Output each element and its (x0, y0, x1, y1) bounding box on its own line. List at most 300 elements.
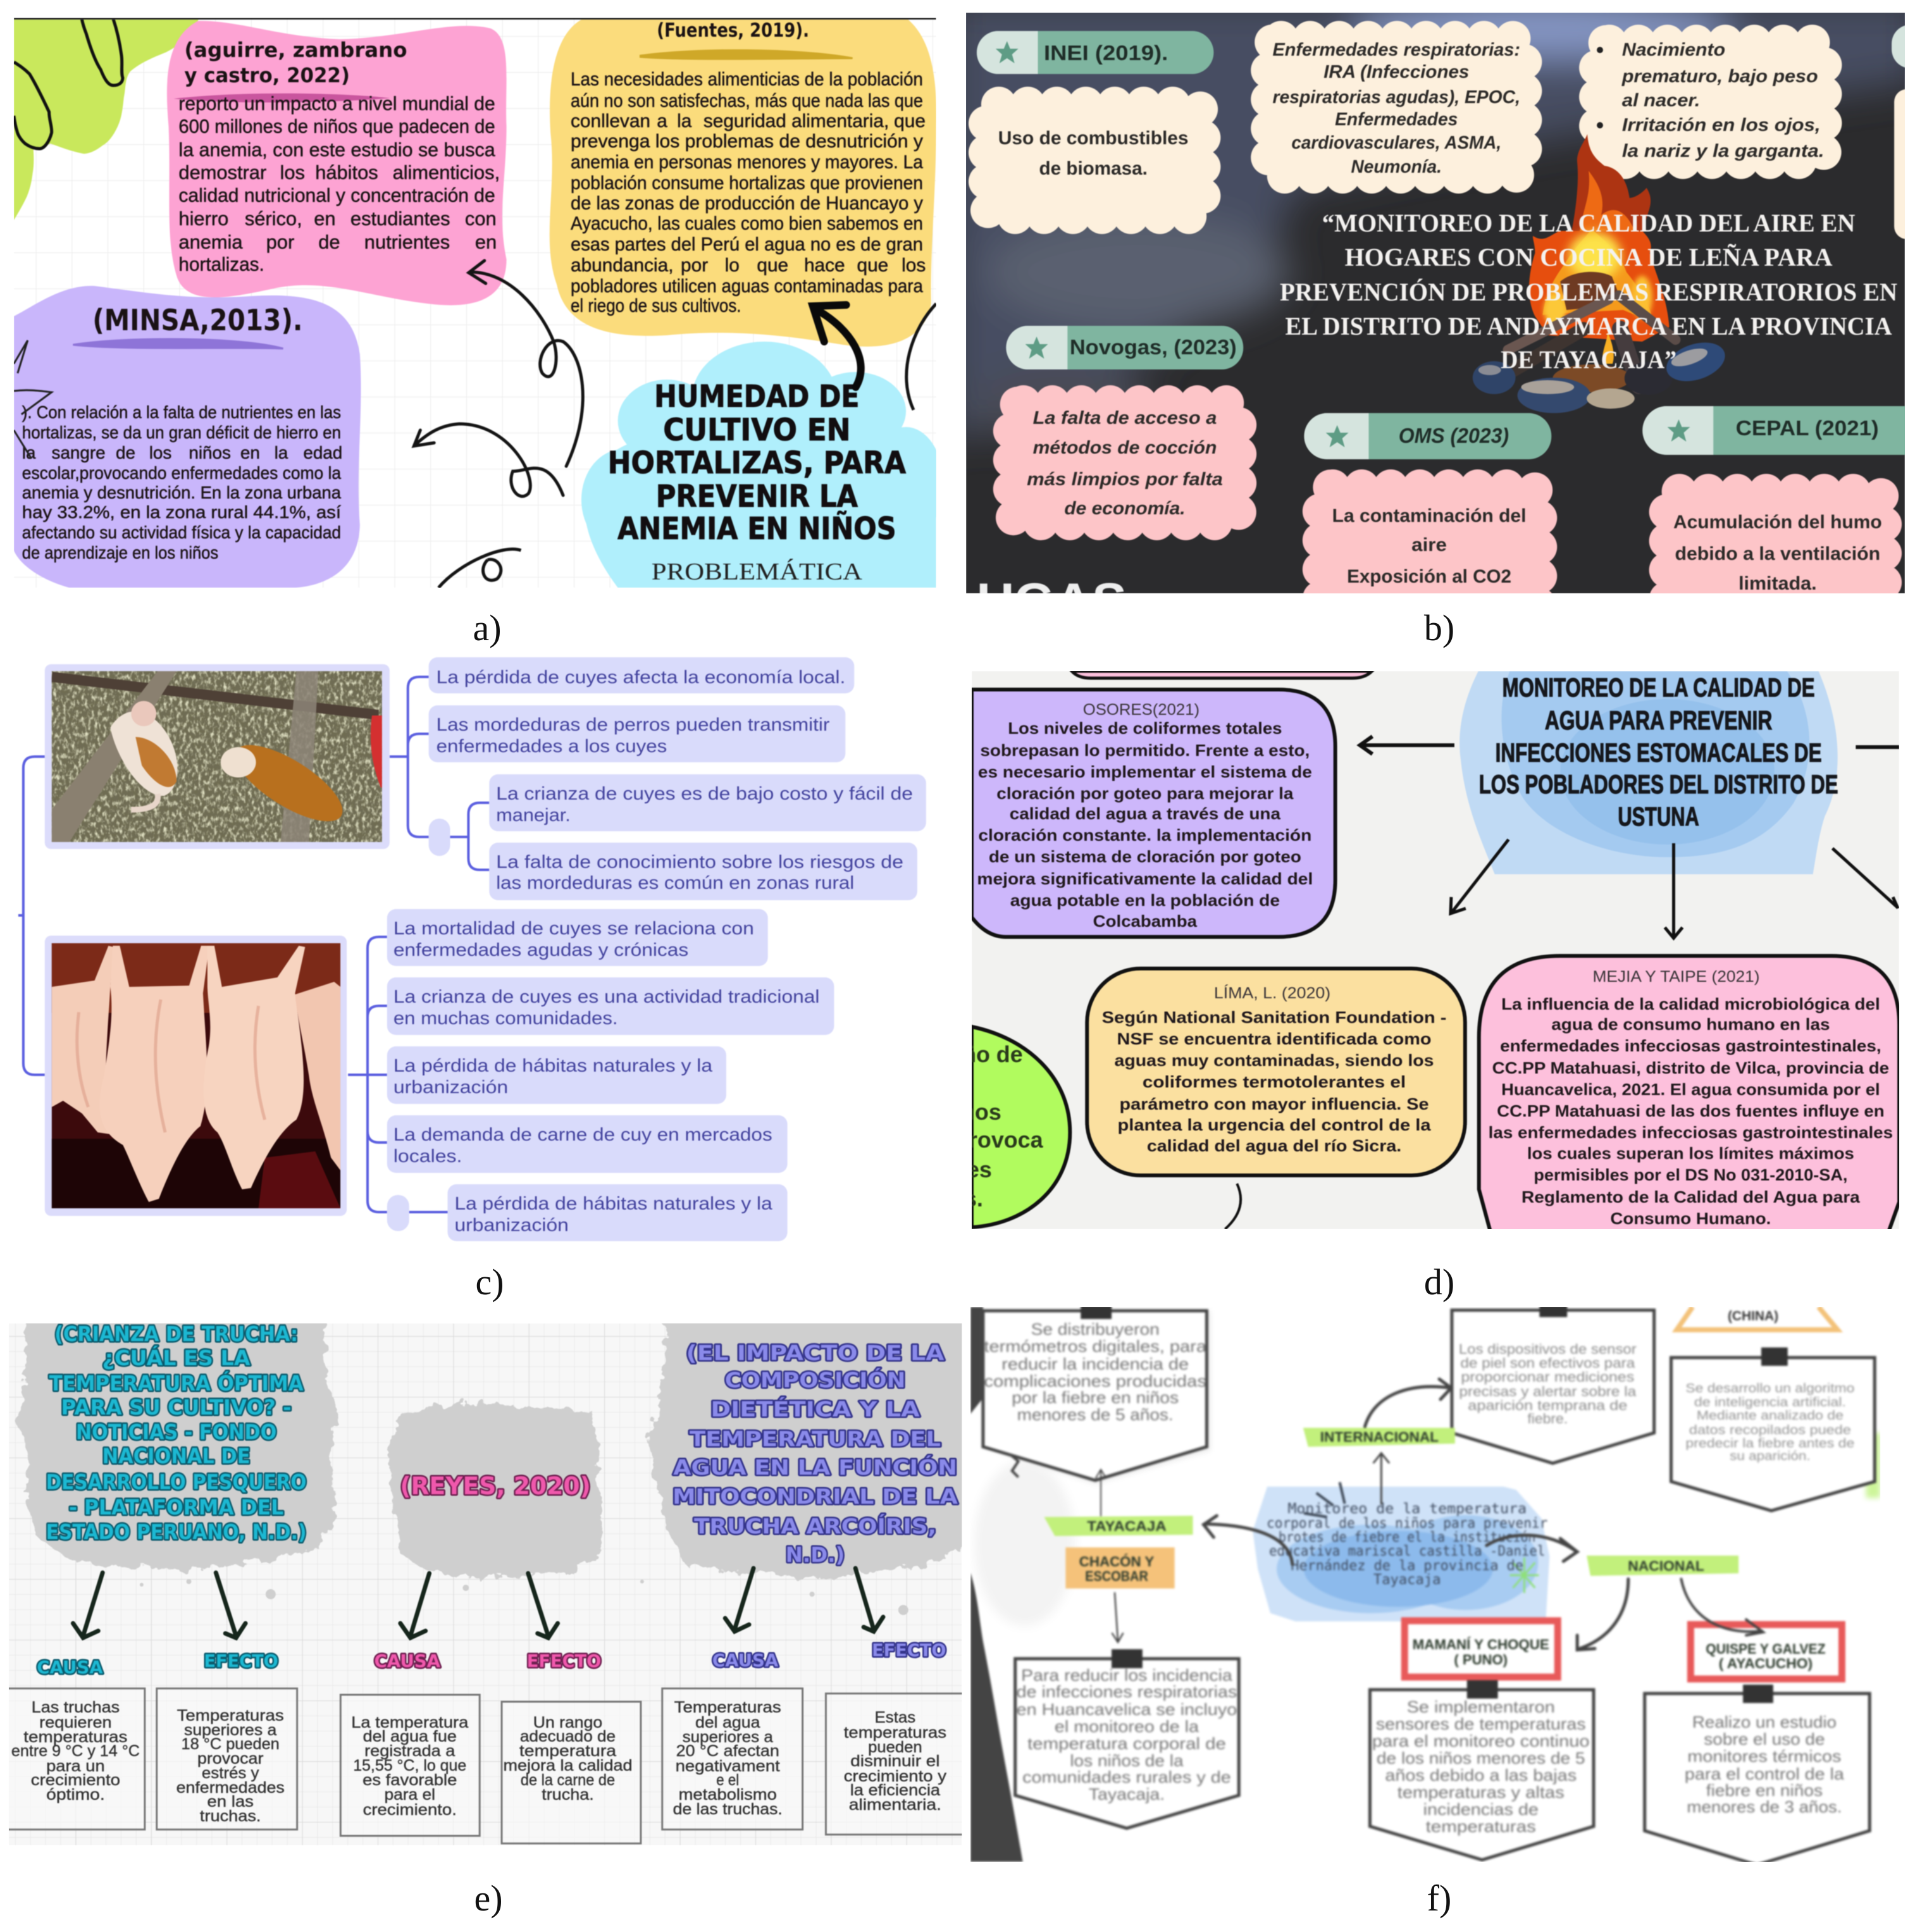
box 5: del agua (695, 1714, 760, 1731)
label: causa 2: CAUSA (375, 1650, 440, 1671)
card: falta de acceso: métodos de cocción (1033, 438, 1217, 458)
label: causa 3: CAUSA (712, 1650, 779, 1671)
caption a: a) (473, 607, 502, 648)
body text: abundancia, (571, 255, 674, 276)
small node oval (429, 819, 450, 856)
pill: Novogas: Novogas, (2023) (1070, 335, 1237, 359)
heading 3: COMPOSICIÓN (725, 1367, 905, 1392)
shield: sensor de piel: de piel son efectivos para (1460, 1355, 1635, 1371)
pill: INEI: INEI (2019). (1044, 41, 1168, 65)
shield: monitores Ayacucho (1645, 1685, 1869, 1865)
shield: sensores Puno (1370, 1680, 1594, 1860)
center text: Monitoreo de la temperatura (1287, 1501, 1527, 1517)
card: acumulación (1667, 492, 1884, 618)
shield: termómetros: menores de 5 años. (1017, 1406, 1174, 1424)
arrows (1360, 736, 1899, 938)
body text: de aprendizaje en los niños (22, 543, 218, 562)
body text: de (318, 231, 340, 253)
shield: algoritmo: Mediante analizado de (1697, 1409, 1844, 1423)
shield: sensores Puno: incidencias de (1423, 1801, 1539, 1819)
label: Tayacaja: TAYACAJA (1087, 1518, 1167, 1534)
heading 3: (EL IMPACTO DE LA (686, 1341, 945, 1365)
title text: ANEMIA EN NIÑOS (617, 511, 896, 547)
center text: brotes de fiebre el la institución (1279, 1530, 1535, 1545)
shield: algoritmo (1671, 1347, 1875, 1511)
node 2: Las mordeduras de perros pueden transmitir (437, 715, 830, 735)
body text: anemia en personas menores y mayores. La (571, 152, 923, 173)
shield: termómetros: Se distribuyeron (1031, 1321, 1160, 1339)
box 5: metabolismo (679, 1786, 777, 1804)
body text: a (657, 111, 667, 132)
body text (571, 69, 926, 316)
label: Quispe y Galvez (1690, 1625, 1842, 1679)
card: falta de acceso: de economía. (1064, 498, 1186, 519)
curve fragment (1225, 1184, 1241, 1229)
shield: sensor de piel: precisas y alertar sobre la (1459, 1384, 1637, 1399)
body text: la (677, 111, 692, 132)
gray blob 2 (388, 1403, 602, 1579)
box 1: Las truchas (32, 1699, 120, 1716)
heading 3 (672, 1341, 958, 1567)
node 9: urbanización (454, 1215, 569, 1235)
green circle cropped: ño de (962, 1041, 1023, 1067)
card: MEJIA Y TAIPE: los cuales superan los límites máximos (1527, 1145, 1854, 1163)
body text: hierro (178, 207, 228, 230)
title (1479, 672, 1838, 831)
box 3: La temperatura (351, 1714, 468, 1731)
box 2: provocar (197, 1750, 263, 1768)
label: efecto 1: EFECTO (204, 1650, 278, 1671)
heading 3: DIETÉTICA Y LA (710, 1396, 920, 1421)
card: acumulación: Acumulación del humo (1673, 512, 1882, 533)
splatter (140, 1579, 908, 1615)
center text: educativa mariscal castilla -Daniel (1269, 1544, 1545, 1559)
body text: estudiantes (350, 207, 450, 230)
heading 1: NACIONAL DE (102, 1444, 251, 1468)
box 4: Un rango (533, 1714, 602, 1731)
card: MEJIA Y TAIPE: las enfermedades infecciosas gastrointestinales (1489, 1124, 1893, 1142)
card: enfermedades: Enfermedades (1335, 109, 1458, 130)
body text: por (266, 231, 294, 253)
arrows (1096, 1379, 1763, 1650)
label: Chacón y Escobar: CHACÓN Y (1079, 1554, 1155, 1570)
node 4 (489, 843, 917, 900)
box 1: crecimiento (31, 1771, 120, 1789)
box 1: entre 9 °C y 14 °C (11, 1742, 140, 1760)
card: OSORES: calidad del agua a través de una (1010, 805, 1281, 823)
shield: monitores Ayacucho: fiebre en niños (1706, 1782, 1823, 1800)
left dark silhouette and splash (970, 1307, 1075, 1862)
card: LÍMA: calidad del agua del río Sicra. (1147, 1137, 1401, 1155)
small node oval (387, 1195, 409, 1231)
card: falta de acceso (1011, 403, 1239, 523)
shield: sensor de piel: fiebre. (1527, 1411, 1568, 1427)
connectors (18, 677, 489, 1212)
body text: que (757, 255, 788, 276)
node 8 (387, 1115, 788, 1173)
panel f: temperatura corporal (970, 1306, 1880, 1865)
box 6: crecimiento y (844, 1768, 947, 1785)
caption b: b) (1424, 607, 1454, 648)
card: OSORES: OSORES(2021) (1083, 701, 1199, 719)
box 2: enfermedades (177, 1779, 285, 1797)
green circle cropped (950, 1027, 1070, 1227)
card: nacimiento: Nacimiento (1622, 40, 1725, 60)
green strip (1866, 1433, 1880, 1498)
label: Nacional: NACIONAL (1628, 1558, 1704, 1574)
body text: el riego de sus cultivos. (571, 295, 741, 316)
card: contaminación (1320, 487, 1539, 614)
brush underline (640, 50, 853, 59)
heading 2: (REYES, 2020) (400, 1472, 591, 1500)
label: efecto 3: EFECTO (872, 1640, 946, 1661)
box 2: en las (207, 1793, 254, 1811)
node 9: La pérdida de hábitas naturales y la (454, 1194, 773, 1214)
shield: monitores Ayacucho: monitores térmicos (1687, 1748, 1841, 1766)
box 6: pueden (868, 1738, 922, 1756)
body text: seguridad (703, 111, 786, 132)
card: enfermedades: Neumonía. (1351, 157, 1442, 177)
body text: en (240, 443, 260, 462)
box 2: Temperaturas (177, 1707, 284, 1725)
box 2: truchas. (200, 1807, 261, 1825)
main title: EL DISTRITO DE ANDAYMARCA EN LA PROVINCIA (1285, 312, 1892, 340)
star doodle (14, 340, 52, 459)
label: Internacional (1303, 1428, 1455, 1447)
body text: hortalizas, se da un gran déficit de hierro en (22, 423, 341, 442)
shield: algoritmo: su aparición. (1730, 1449, 1811, 1463)
arrows (73, 1568, 883, 1638)
label: Mamaní y Choque (1404, 1621, 1558, 1677)
heading 3: MITOCONDRIAL DE LA (672, 1484, 958, 1509)
main title (1280, 209, 1897, 374)
shield: termómetros: complicaciones producidas (984, 1373, 1206, 1390)
shield: sensor de piel: proporcionar mediciones (1461, 1369, 1634, 1385)
node 2 (429, 705, 845, 762)
card: MEJIA Y TAIPE: MEJIA Y TAIPE (2021) (1593, 968, 1759, 986)
box 3: registrada a (364, 1742, 456, 1760)
body text: en (314, 207, 336, 230)
card: enfermedades: respiratorias agudas), EPOC, (1273, 87, 1520, 108)
body text: niños (189, 443, 231, 462)
title text: CULTIVO EN (663, 413, 851, 448)
blue watercolor center (1253, 1482, 1549, 1621)
body text: hortalizas. (178, 253, 264, 275)
heading 3: TEMPERATURA DEL (690, 1427, 941, 1451)
main title: PREVENCIÓN DE PROBLEMAS RESPIRATORIOS EN (1280, 278, 1897, 306)
title text (608, 380, 906, 547)
body text: sangre (52, 443, 106, 462)
card: acumulación: limitada. (1738, 573, 1817, 594)
shield: sensor de piel (1452, 1306, 1654, 1463)
shield: Huancavelica: Tayacaja. (1089, 1786, 1165, 1804)
card: nacimiento: al nacer. (1622, 90, 1700, 111)
card: OSORES: Los niveles de coliformes totales (1008, 720, 1282, 738)
body text (178, 92, 500, 275)
body text: de (116, 443, 135, 462)
heading (184, 38, 407, 87)
label: Chacón y Escobar (1065, 1547, 1175, 1588)
shield: sensores Puno: Se implementaron (1407, 1699, 1555, 1716)
body text: pobladores utilicen aguas contaminadas para (571, 276, 923, 297)
right edge cropped elements (1892, 25, 1915, 239)
body text: Ayacucho, las cuales como bien sabemos en (571, 213, 923, 234)
shield: algoritmo: de inteligencia artificial. (1694, 1396, 1846, 1409)
card: biomasa: Uso de combustibles (998, 128, 1189, 149)
purple blob: MINSA (14, 286, 361, 588)
brush underline (73, 339, 283, 349)
pill: Novogas (1006, 326, 1243, 369)
green circle cropped: mos (955, 1099, 1001, 1125)
shield: sensores Puno: para el monitoreo continuo (1372, 1733, 1590, 1750)
box 3 (340, 1695, 480, 1836)
center text: corporal de los niños para prevenir (1267, 1516, 1547, 1532)
panel c: cuyes mind map (18, 657, 926, 1241)
card: contaminación: Exposición al CO2 (1347, 566, 1511, 587)
node 9 (448, 1184, 788, 1241)
green circle cropped: ies (960, 1156, 992, 1182)
brush underline (173, 94, 390, 102)
card: LÍMA: parámetro con mayor influencia. Se (1120, 1096, 1429, 1113)
box 2: 18 °C pueden (182, 1735, 280, 1753)
card: LÍMA: coliformes termotolerantes el (1143, 1074, 1406, 1091)
center text: Hernández de la provincia de (1291, 1558, 1523, 1574)
card: nacimiento (1597, 40, 1825, 161)
box 4: temperatura (519, 1742, 616, 1760)
heading 3: TRUCHA ARCOÍRIS, (694, 1513, 936, 1539)
center text: Tayacaja (1373, 1572, 1441, 1588)
card: falta de acceso: más limpios por falta (1027, 469, 1223, 490)
heading: (MINSA,2013). (92, 303, 302, 337)
label: China: (CHINA) (1728, 1309, 1778, 1323)
heading 3: AGUA EN LA FUNCIÓN (673, 1454, 957, 1480)
title: MONITOREO DE LA CALIDAD DE (1503, 672, 1815, 702)
card: OSORES: es necesario implementar el sistema de (978, 764, 1312, 781)
card: acumulación: debido a la ventilación (1675, 543, 1880, 564)
shield: sensor de piel: Los dispositivos de sensor (1459, 1341, 1637, 1357)
pill: CEPAL (1642, 406, 1915, 455)
node 8: La demanda de carne de cuy en mercados (394, 1125, 772, 1145)
label: Quispe y Galvez: QUISPE Y GALVEZ (1706, 1641, 1826, 1657)
shield: monitores Ayacucho: sobre el uso de (1704, 1731, 1825, 1749)
box 3: del agua fue (363, 1728, 457, 1745)
body text: afectando su actividad física y la capacidad (22, 523, 341, 542)
pill: OMS: OMS (2023) (1399, 424, 1509, 447)
body text: que (894, 111, 926, 132)
body text: alimenticios, (393, 161, 500, 183)
box 4: trucha. (542, 1786, 594, 1804)
body text: lo (725, 255, 740, 276)
body text: que (857, 255, 888, 276)
body text: reporto un impacto a nivel mundial de (178, 92, 495, 115)
body text: sérico, (245, 207, 302, 230)
panel d: calidad de agua (950, 671, 1899, 1234)
card: OSORES (972, 690, 1336, 937)
heading: (aguirre, zambrano (184, 38, 407, 62)
shield: sensores Puno: años debido a las bajas (1385, 1767, 1577, 1785)
card: enfermedades (1268, 39, 1524, 177)
title: AGUA PARA PREVENIR (1545, 705, 1772, 735)
box 4: de la carne de (521, 1771, 615, 1789)
card: MEJIA Y TAIPE: permisibles por el DS No 031-2010-SA, (1534, 1167, 1847, 1184)
shield: sensores Puno: de los niños menores de 5 (1377, 1750, 1585, 1768)
caption e: e) (474, 1878, 503, 1919)
shield: monitores Ayacucho: Realizo un estudio (1692, 1714, 1837, 1731)
heading 1: ESTADO PERUANO, N.D.) (46, 1520, 307, 1544)
cropped pink box at top (1072, 671, 1372, 678)
node 4: las mordeduras es común en zonas rural (496, 873, 854, 893)
top rule (14, 17, 936, 20)
card: enfermedades: cardiovasculares, ASMA, (1291, 133, 1501, 153)
card: MEJIA Y TAIPE: Huancavelica, 2021. El agua consumida por el (1501, 1081, 1880, 1099)
box 1: para un (46, 1757, 105, 1775)
shield: Huancavelica: temperatura corporal de (1027, 1735, 1226, 1753)
shield: sensores Puno: sensores de temperaturas (1376, 1716, 1586, 1733)
node 6 (387, 977, 834, 1035)
caption f: f) (1427, 1878, 1451, 1919)
box 5: de las truchas. (673, 1800, 783, 1818)
box 5: superiores a (683, 1728, 773, 1746)
cropped white word: UGAS (977, 574, 1127, 628)
node 3 (489, 774, 926, 831)
box 1 (6, 1688, 145, 1830)
shield: termómetros (983, 1306, 1210, 1484)
body text: anemia (178, 231, 243, 253)
shield: algoritmo: datos recopilados puede (1689, 1423, 1851, 1437)
body text: alimentaria, (791, 111, 889, 132)
body text: esas partes del Perú el agua no es de gran (571, 234, 923, 255)
label: China (1676, 1307, 1837, 1330)
pill: CEPAL: CEPAL (2021) (1736, 416, 1879, 440)
node 8: locales. (394, 1146, 462, 1167)
box 4 (502, 1702, 641, 1843)
box 5: negativament (676, 1757, 780, 1775)
shield: sensores Puno: temperaturas (1426, 1818, 1536, 1836)
arrow to yellow (813, 305, 861, 387)
box 5: Temperaturas (674, 1699, 781, 1716)
node 4: La falta de conocimiento sobre los riesgos de (496, 852, 903, 872)
node 2: enfermedades a los cuyes (437, 736, 667, 757)
label: efecto 2: EFECTO (527, 1650, 601, 1671)
body text: 600 millones de niños que padecen de (178, 115, 495, 137)
label: Mamaní y Choque: ( PUNO) (1454, 1652, 1508, 1668)
heading 1: NOTICIAS - FONDO (76, 1420, 276, 1444)
card: nacimiento: prematuro, bajo peso (1621, 66, 1818, 87)
box 6: alimentaria. (849, 1796, 941, 1814)
green blob (14, 19, 199, 220)
pink blob: aguirre (167, 21, 507, 305)
node 3: manejar. (496, 805, 571, 826)
card: OSORES: agua potable en la población de (1010, 892, 1280, 910)
heading 1: PARA SU CULTIVO? - (61, 1395, 292, 1420)
card: LÍMA: aguas muy contaminadas, siendo los (1115, 1052, 1434, 1070)
node 6: La crianza de cuyes es una actividad tradicional (394, 987, 819, 1007)
gray blob 1 (17, 1310, 338, 1570)
label: Chacón y Escobar: ESCOBAR (1085, 1568, 1148, 1584)
main title: HOGARES CON COCINA DE LEÑA PARA (1345, 243, 1833, 271)
box 2: estrés y (202, 1764, 259, 1782)
blue watercolor blob (1459, 671, 1838, 874)
pill: INEI (977, 31, 1213, 74)
heading 3: N.D.) (786, 1542, 845, 1567)
card: MEJIA Y TAIPE (1479, 956, 1899, 1234)
card: falta de acceso: La falta de acceso a (1033, 408, 1217, 428)
main title: DE TAYACAJA” (1501, 345, 1676, 374)
node 1 (429, 657, 854, 693)
body text: edad (303, 443, 342, 462)
card: enfermedades: Enfermedades respiratorias: (1273, 40, 1520, 60)
node 3: La crianza de cuyes es de bajo costo y fácil de (496, 784, 913, 804)
body text: escolar,provocando enfermedades como la (22, 463, 341, 483)
body text (22, 402, 342, 562)
title text: HORTALIZAS, PARA (608, 446, 906, 481)
shield: monitores Ayacucho: menores de 3 años. (1687, 1799, 1842, 1816)
box 2: superiores a (184, 1721, 276, 1739)
card: OSORES: sobrepasan lo permitido. Frente a esto, (980, 742, 1310, 760)
shield: Huancavelica: el monitoreo de la (1055, 1718, 1199, 1736)
heading 1: DESARROLLO PESQUERO (46, 1470, 307, 1494)
heading: (Fuentes, 2019). (657, 20, 809, 42)
node 7: La pérdida de hábitas naturales y la (394, 1056, 713, 1076)
arrow to pink (469, 261, 583, 466)
body text: hábitos (315, 161, 378, 183)
yellow blob: Fuentes (550, 18, 936, 347)
green circle cropped: os. (950, 1186, 983, 1211)
box 4: adecuado de (520, 1728, 616, 1745)
heading: y castro, 2022) (184, 63, 350, 87)
body text: en (475, 231, 497, 253)
box 1: requieren (39, 1714, 112, 1731)
box 6: disminuir el (850, 1752, 940, 1770)
box 3: 15,55 °C, lo que (353, 1757, 466, 1774)
body text: ). Con relación a la falta de nutrientes en las (22, 402, 341, 422)
body text: de las zonas de producción de Huancayo y (571, 193, 923, 214)
title text: HUMEDAD DE (654, 380, 859, 414)
card: MEJIA Y TAIPE: Consumo Humano. (1610, 1210, 1771, 1228)
label: Nacional (1587, 1556, 1738, 1576)
card: LÍMA: NSF se encuentra identificada como (1117, 1031, 1432, 1048)
box 3: para el (384, 1786, 435, 1804)
node 1: La pérdida de cuyes afecta la economía local. (437, 667, 845, 688)
gray blob 3 (648, 1310, 969, 1579)
box 5: 20 °C afectan (676, 1742, 779, 1760)
label: causa 1: CAUSA (37, 1657, 103, 1678)
box 2 (157, 1688, 297, 1830)
card: MEJIA Y TAIPE: agua de consumo humano en las (1551, 1016, 1830, 1034)
shield: Huancavelica (1015, 1649, 1239, 1828)
heading 1: TEMPERATURA ÓPTIMA (49, 1370, 304, 1396)
body text: la (275, 443, 288, 462)
box 6: Estas (875, 1709, 915, 1726)
label: Tayacaja (1044, 1516, 1193, 1536)
shield: Huancavelica: en Huancavelica se incluyo (1017, 1701, 1237, 1719)
cyan cloud: title (581, 342, 944, 588)
shield: sensor de piel: aparición temprana de (1468, 1397, 1627, 1413)
card: enfermedades: IRA (Infecciones (1323, 62, 1469, 82)
shield: algoritmo: predecir la fiebre antes de (1685, 1437, 1854, 1451)
body text: hace (804, 255, 845, 276)
body text: aún no son satisfechas, más que nada las que (571, 90, 923, 111)
card: OSORES: mejora significativamente la calidad del (977, 870, 1313, 888)
card: contaminación: La contaminación del (1332, 505, 1526, 526)
body text: prevenga los problemas de desnutrición y (571, 131, 923, 152)
shield: monitores Ayacucho: para el control de la (1685, 1766, 1845, 1783)
card: OSORES: Colcabamba (1093, 913, 1198, 931)
body text: población consume hortalizas que provienen (571, 173, 923, 194)
node 5: La mortalidad de cuyes se relaciona con (394, 919, 754, 939)
decorative curls (438, 304, 936, 588)
card: LÍMA: LÍMA, L. (2020) (1214, 984, 1330, 1002)
